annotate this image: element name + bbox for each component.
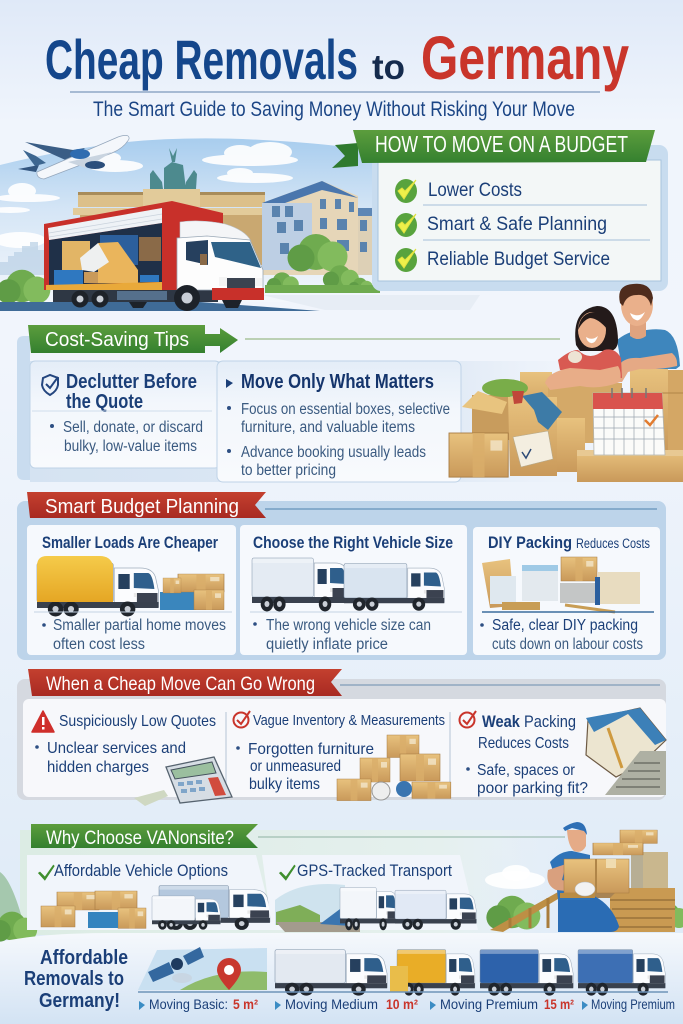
card: diy packing: DIY Packing	[488, 533, 572, 552]
wheels	[72, 290, 88, 308]
card: diy packing: Reduces Costs	[576, 536, 650, 551]
map with satellite and pin	[138, 947, 267, 990]
item: lower costs	[395, 179, 522, 203]
vehicle labels	[139, 996, 675, 1012]
pallet	[560, 893, 595, 898]
title part: Cheap Removals: Cheap Removals	[45, 28, 358, 91]
card: move only what matters: Move Only What Matters	[241, 371, 434, 393]
icon: airplane	[18, 135, 129, 179]
man	[617, 284, 680, 382]
plants	[482, 379, 528, 397]
vehicle labels: Moving Medium	[285, 996, 378, 1012]
trousers	[558, 896, 619, 932]
wrapped mattress	[586, 708, 666, 777]
trees and bushes	[0, 234, 380, 304]
card: declutter: Sell, donate, or discard	[63, 419, 203, 436]
ribbon tail	[332, 143, 358, 168]
roller door	[48, 208, 162, 240]
back boxes	[520, 368, 683, 452]
column: low quotes: Suspiciously Low Quotes	[59, 713, 216, 730]
item: lower costs: Lower Costs	[428, 180, 522, 201]
skyline	[0, 242, 45, 275]
satellite	[148, 947, 204, 983]
panel: cost-saving tips	[17, 325, 620, 482]
card: right vehicle size	[240, 525, 467, 655]
panel: smart budget planning	[17, 492, 666, 660]
stacked boxes	[593, 830, 668, 898]
cap	[563, 822, 587, 835]
hero illustration	[0, 135, 480, 311]
vehicle lineup	[275, 950, 665, 996]
footer background	[0, 933, 683, 1024]
card: move only what matters: Focus on essential boxes, selective	[241, 401, 450, 418]
clouds	[0, 142, 298, 248]
vehicle labels: 5 m²	[233, 996, 258, 1012]
column: vague inventory: or unmeasured	[250, 758, 341, 775]
card: declutter	[30, 361, 220, 468]
icon: location pin	[217, 958, 241, 990]
panel frame	[17, 336, 217, 480]
windshield	[211, 242, 261, 268]
cab fairing	[180, 221, 251, 241]
footer slogan	[24, 947, 128, 1012]
packing supplies	[482, 557, 640, 612]
arm	[547, 864, 578, 892]
quadriga	[150, 148, 197, 189]
column: vague inventory: Vague Inventory & Measurements	[253, 712, 445, 729]
footer slogan: Germany!	[39, 990, 120, 1012]
card: affordable vehicle options	[27, 855, 275, 930]
column: weak packing	[460, 708, 666, 797]
note	[513, 431, 553, 467]
blue cloth	[522, 392, 562, 430]
icon: warning	[32, 711, 54, 732]
icon: shield check	[42, 375, 58, 395]
vehicle labels: 10 m²	[386, 996, 418, 1012]
banner: Smart Budget Planning	[45, 496, 239, 518]
icon: calculator	[134, 757, 232, 806]
panel background	[20, 830, 580, 935]
card: smaller loads: Smaller partial home moves	[53, 617, 226, 634]
cargo interior	[49, 223, 162, 285]
card: smaller loads	[27, 525, 236, 655]
sky	[0, 138, 372, 302]
column: low quotes	[32, 711, 232, 806]
item: smart and safe planning: Smart & Safe Planning	[427, 214, 607, 235]
card: right vehicle size: The wrong vehicle size can	[266, 617, 431, 634]
card: declutter: bulky, low-value items	[64, 438, 197, 455]
banner: When a Cheap Move Can Go Wrong	[46, 673, 315, 695]
left tree	[0, 872, 37, 942]
column: low quotes: Unclear services and	[47, 740, 186, 757]
yellow truck	[37, 556, 159, 616]
road scene	[275, 884, 345, 925]
card: move only what matters: to better pricing	[241, 462, 336, 479]
panel background	[17, 501, 666, 660]
column: vague inventory: Forgotten furniture	[248, 741, 374, 758]
banner: cost-saving tips	[28, 325, 238, 353]
panel background	[17, 679, 666, 800]
item: reliable budget service	[395, 248, 610, 272]
column: weak packing: Reduces Costs	[478, 735, 569, 752]
banner: Why Choose VANonsite?	[46, 828, 234, 849]
footer slogan: Removals to	[24, 968, 124, 990]
card: move only what matters: furniture, and valuable items	[241, 419, 415, 436]
column: weak packing: Safe, spaces or	[477, 762, 576, 779]
side window	[186, 240, 208, 265]
icon: red check	[234, 711, 250, 728]
floor	[46, 282, 162, 290]
blue-roof building	[262, 181, 372, 275]
worker	[547, 822, 619, 932]
column: vague inventory	[234, 711, 451, 801]
subtitle: The Smart Guide to Saving Money Without Risking Your Move	[93, 98, 575, 121]
card: gps-tracked transport	[262, 855, 478, 932]
panel: why choose vanonsite	[0, 824, 580, 942]
worker carrying box	[485, 822, 683, 932]
title	[45, 24, 629, 92]
road	[0, 302, 320, 311]
panel: when a cheap move can go wrong	[17, 669, 666, 806]
title part: Germany: Germany	[421, 24, 629, 92]
red box	[44, 201, 223, 290]
trucks	[340, 887, 398, 930]
staircase	[490, 888, 675, 932]
carried box	[564, 859, 629, 893]
card: declutter: the Quote	[66, 391, 143, 413]
banner: cost-saving tips: Cost-Saving Tips	[45, 329, 189, 351]
column: weak packing: Weak Packing	[482, 712, 576, 731]
footer slogan: Affordable	[40, 947, 128, 969]
head	[567, 830, 586, 852]
stairs	[605, 751, 666, 795]
boxes and tape	[337, 735, 451, 801]
icon: calendar	[593, 388, 665, 455]
woman	[545, 306, 622, 390]
trucks	[159, 885, 270, 930]
card: gps-tracked transport: GPS-Tracked Transport	[297, 861, 452, 880]
icon: red check	[460, 711, 476, 728]
moving truck	[44, 201, 264, 311]
card: smaller loads: often cost less	[53, 636, 145, 653]
card: diy packing: cuts down on labour costs	[492, 636, 643, 653]
chassis	[53, 288, 218, 302]
boxes	[160, 574, 224, 610]
card: smaller loads: Smaller Loads Are Cheaper	[42, 534, 218, 552]
column: weak packing: poor parking fit?	[477, 780, 588, 797]
grille	[227, 278, 255, 288]
bumper	[212, 288, 264, 300]
vehicle labels: Moving Basic:	[149, 996, 228, 1012]
card: diy packing: Safe, clear DIY packing	[492, 617, 638, 634]
card: move only what matters: Advance booking usually leads	[241, 444, 426, 461]
card: right vehicle size: Choose the Right Vehicle Size	[253, 534, 453, 552]
column: vague inventory: bulky items	[249, 776, 320, 793]
card: declutter: Declutter Before	[66, 371, 197, 393]
card: affordable vehicle options: Affordable Vehicle Options	[54, 861, 228, 880]
cargo: boxes	[54, 235, 161, 285]
white truck large	[252, 558, 350, 612]
glove	[575, 882, 595, 896]
vehicle labels: 15 m²	[544, 996, 574, 1012]
footer band	[0, 933, 683, 1024]
open box	[462, 379, 562, 476]
green banner	[353, 130, 655, 163]
item: reliable budget service: Reliable Budget Service	[427, 249, 610, 270]
panel card	[372, 145, 668, 291]
illustration: couple with boxes and calendar	[449, 284, 683, 482]
panel: how to move on a budget	[332, 130, 668, 291]
boxes	[41, 891, 146, 928]
vehicle labels: Moving Premium	[440, 996, 538, 1012]
title part: to: to	[372, 48, 405, 87]
card: move only what matters	[217, 361, 461, 482]
white truck small	[344, 564, 444, 611]
card: diy packing	[473, 527, 660, 655]
clouds and trees	[485, 865, 683, 930]
Brandenburg gate	[73, 148, 270, 265]
column: low quotes: hidden charges	[47, 759, 149, 776]
boxes	[449, 433, 508, 477]
cab	[177, 236, 263, 290]
card: right vehicle size: quietly inflate price	[266, 636, 388, 653]
shirt	[550, 851, 590, 900]
